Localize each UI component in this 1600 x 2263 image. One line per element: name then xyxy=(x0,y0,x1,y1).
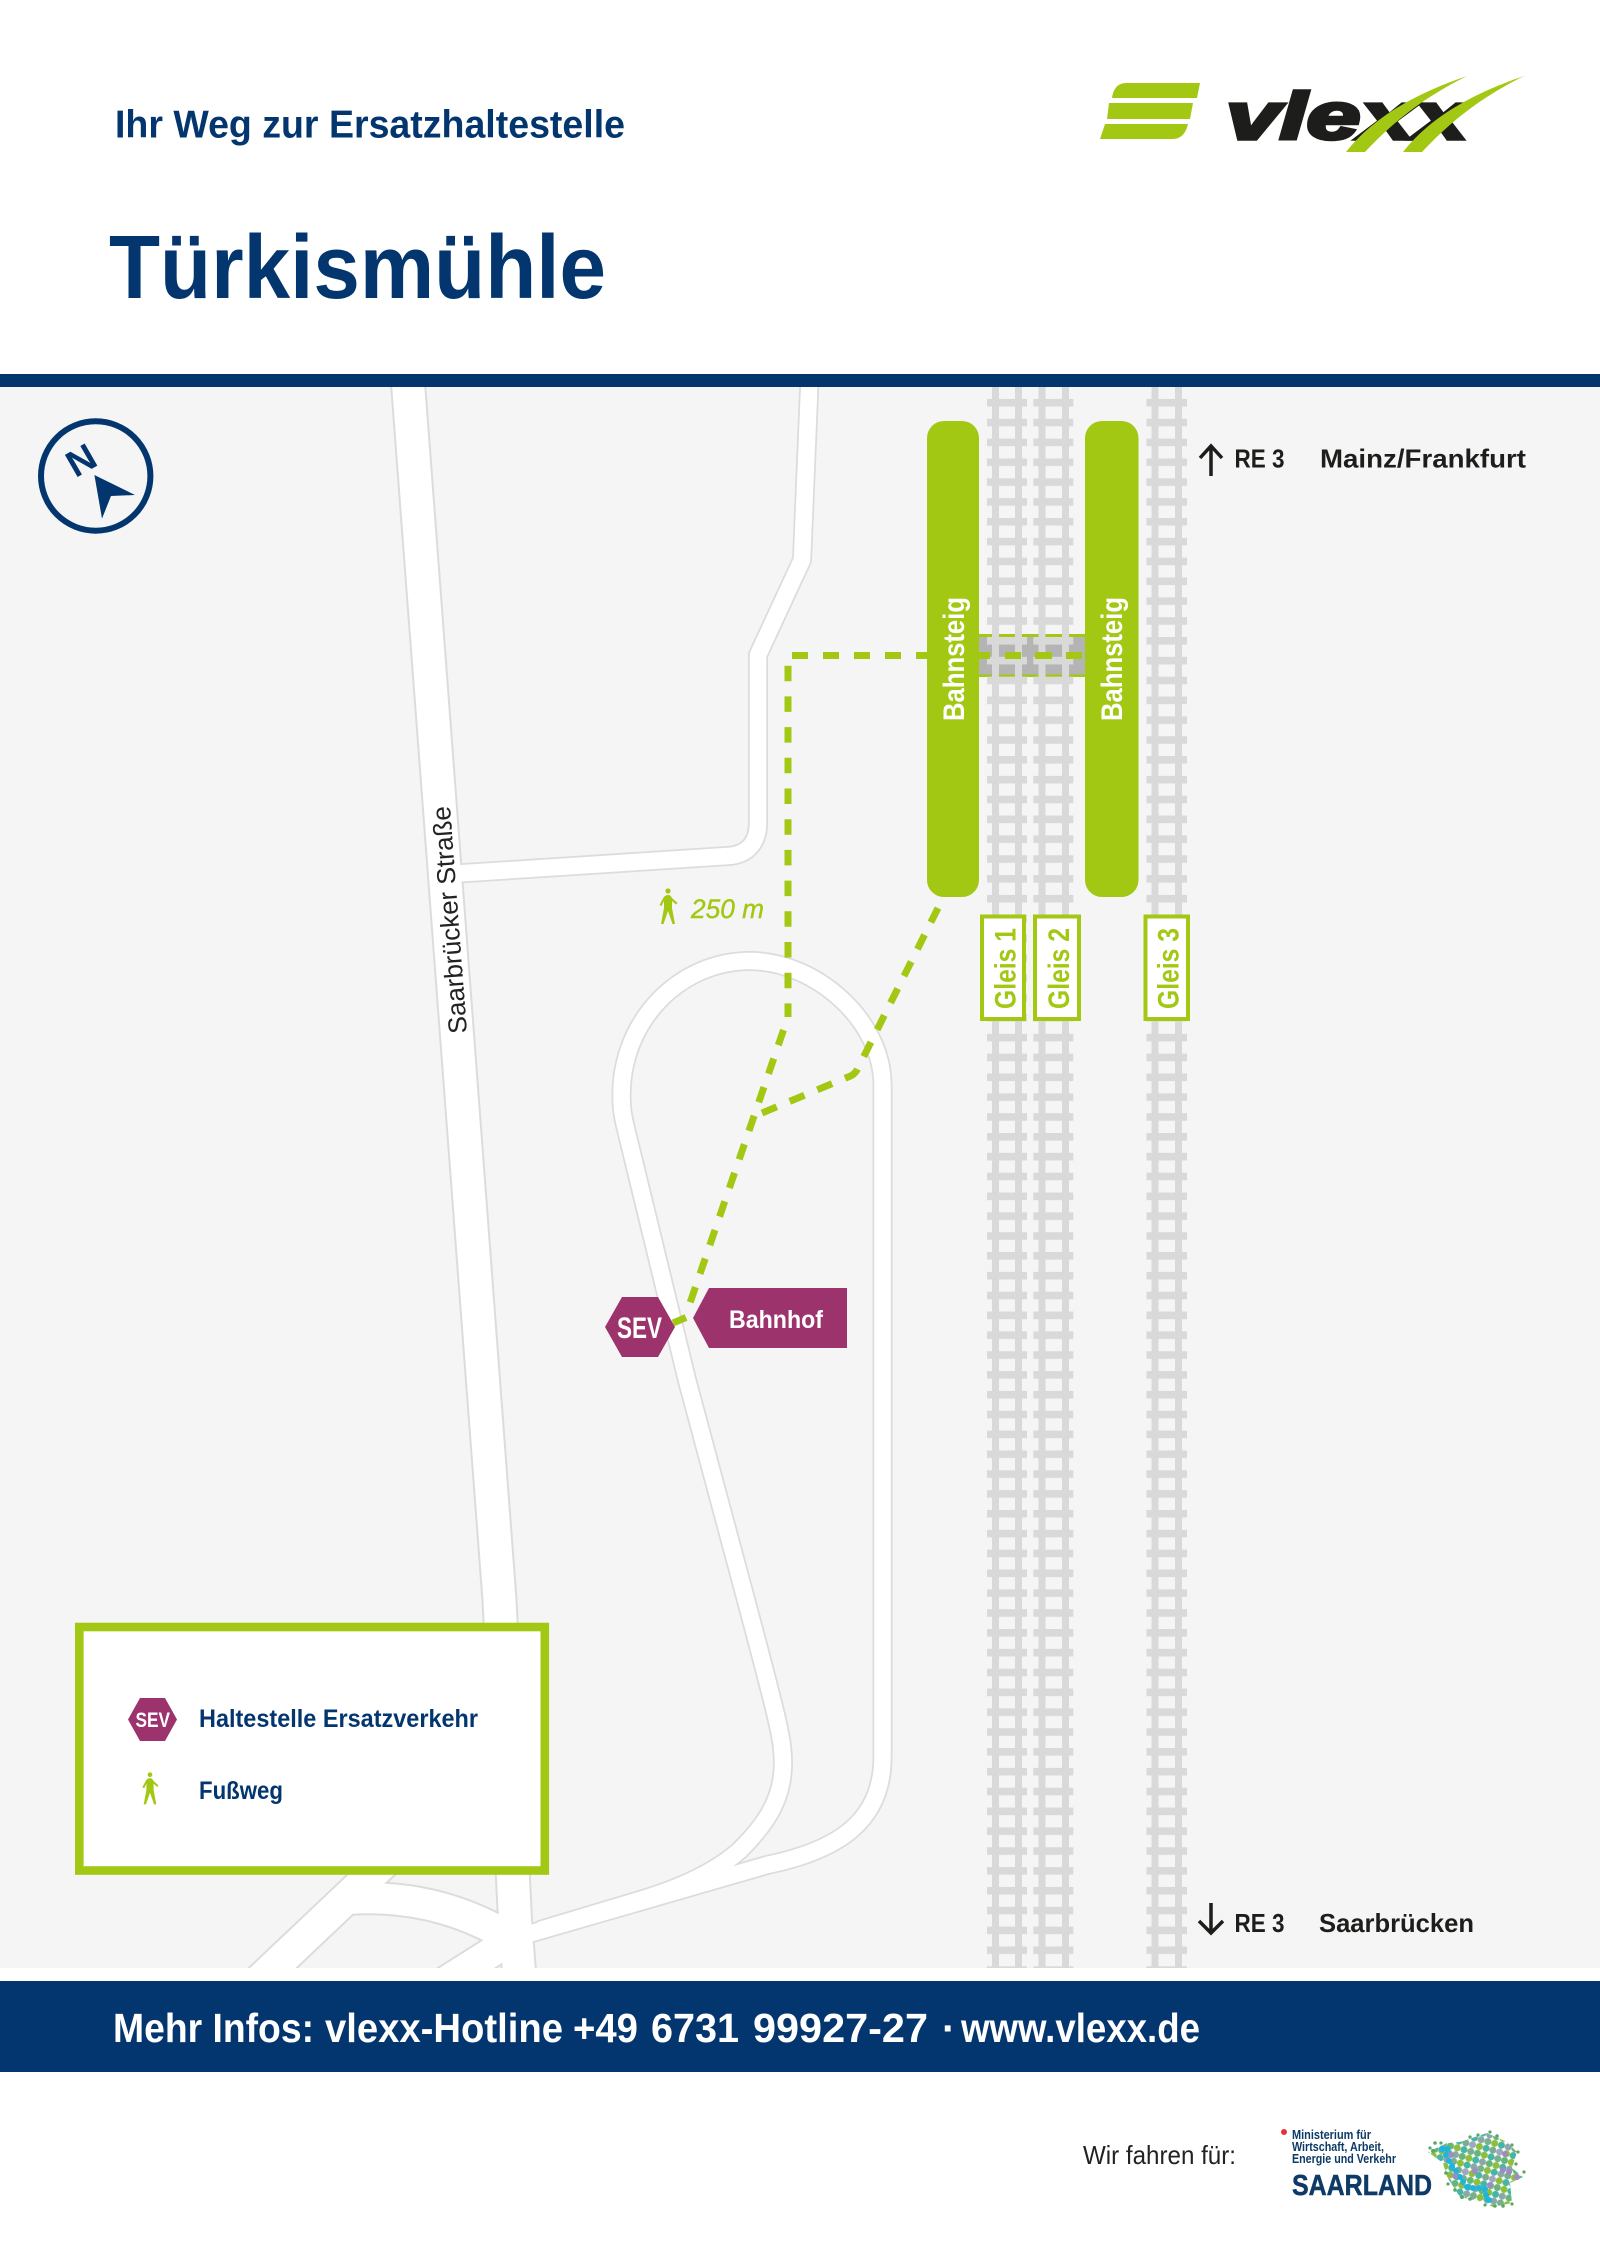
track 1 xyxy=(987,387,1027,1968)
platform crossing xyxy=(979,634,1086,677)
footpath over the crossing xyxy=(979,652,1082,659)
track label: Gleis 2: Gleis 2 xyxy=(1043,928,1076,1009)
ministry name xyxy=(1292,2128,1396,2166)
title: Türkismühle xyxy=(109,218,606,318)
arrow down xyxy=(1199,1903,1223,1933)
walking distance label xyxy=(660,888,764,924)
street label: Saarbrücker Straße xyxy=(426,805,473,1035)
hotline and web address: · xyxy=(942,2005,956,2051)
legend: walker icon xyxy=(142,1772,159,1804)
SEV stop marker xyxy=(605,1297,675,1357)
platform 1 xyxy=(927,421,979,897)
Bahnhof label xyxy=(693,1288,847,1348)
direction south: RE 3 Saarbrücken: Saarbrücken xyxy=(1319,1908,1474,1938)
Bahnhof label: Bahnhof xyxy=(729,1306,824,1334)
hotline and web address: www.vlexx.de xyxy=(960,2005,1200,2051)
compass needle xyxy=(94,475,135,519)
ministry name: Ministerium für xyxy=(1292,2128,1371,2142)
logo: Saarland ministry xyxy=(1281,2128,1526,2210)
platform 1: Bahnsteig xyxy=(938,597,971,721)
hotline and web address: +49 xyxy=(573,2005,638,2051)
direction north: RE 3 Mainz/Frankfurt: RE 3 xyxy=(1234,444,1284,474)
footpath: dashed route xyxy=(690,656,941,1303)
SEV stop marker: SEV xyxy=(617,1312,662,1345)
direction south: RE 3 Saarbrücken: RE 3 xyxy=(1234,1908,1284,1938)
text: Wir fahren für: Wir fahren für: xyxy=(1083,2140,1236,2170)
direction north: RE 3 Mainz/Frankfurt: Mainz/Frankfurt xyxy=(1320,444,1526,474)
compass N: N xyxy=(59,436,104,485)
ministry name: Wirtschaft, Arbeit, xyxy=(1292,2140,1384,2154)
dotted map of Saarland xyxy=(1425,2130,1526,2210)
icon: walker xyxy=(660,888,678,924)
legend: SEV hexagon: SEV xyxy=(136,1709,170,1732)
red dot xyxy=(1281,2129,1287,2135)
legend xyxy=(79,1627,545,1870)
ministry name: Energie und Verkehr xyxy=(1292,2152,1396,2166)
platform 2 xyxy=(1085,421,1138,897)
hotline and web address xyxy=(113,2005,1200,2051)
heading: subtitle: Ihr Weg zur Ersatzhaltestelle xyxy=(115,104,625,146)
platform 2: Bahnsteig xyxy=(1096,597,1129,721)
logo wordmark: vlexx xyxy=(1226,79,1471,153)
hotline and web address: 6731 xyxy=(651,2005,739,2051)
track 3 xyxy=(1146,387,1187,1968)
logo: vlexx xyxy=(1100,76,1524,153)
roads xyxy=(259,370,882,1985)
panel: map xyxy=(0,370,1600,1985)
map background xyxy=(0,387,1600,1968)
track 2 xyxy=(1033,387,1073,1968)
info band xyxy=(0,1981,1600,2072)
dash onto SEV marker xyxy=(673,1318,686,1323)
hotline and web address: 99927-27 xyxy=(753,2005,928,2051)
legend: footpath text: Fußweg xyxy=(199,1777,283,1805)
direction north: RE 3 Mainz/Frankfurt xyxy=(1200,444,1526,476)
legend: SEV text: Haltestelle Ersatzverkehr xyxy=(199,1705,478,1733)
direction south: RE 3 Saarbrücken xyxy=(1199,1903,1474,1938)
hotline and web address: Mehr Infos: xyxy=(113,2005,314,2051)
walking distance label: 250 m xyxy=(690,894,764,924)
track label: Gleis 3 xyxy=(1146,916,1188,1019)
arrow up xyxy=(1200,446,1222,476)
compass xyxy=(41,421,150,531)
SAARLAND wordmark: SAARLAND xyxy=(1292,2170,1432,2202)
track label: Gleis 2 xyxy=(1035,916,1079,1019)
header rule xyxy=(0,374,1600,387)
logo stripes xyxy=(1100,83,1200,139)
track label: Gleis 1 xyxy=(982,916,1024,1019)
legend: SEV hexagon xyxy=(128,1698,177,1741)
track label: Gleis 3: Gleis 3 xyxy=(1152,928,1186,1009)
hotline and web address: vlexx-Hotline xyxy=(325,2005,563,2051)
track label: Gleis 1: Gleis 1 xyxy=(990,928,1022,1009)
logo swooshes xyxy=(1346,76,1524,152)
